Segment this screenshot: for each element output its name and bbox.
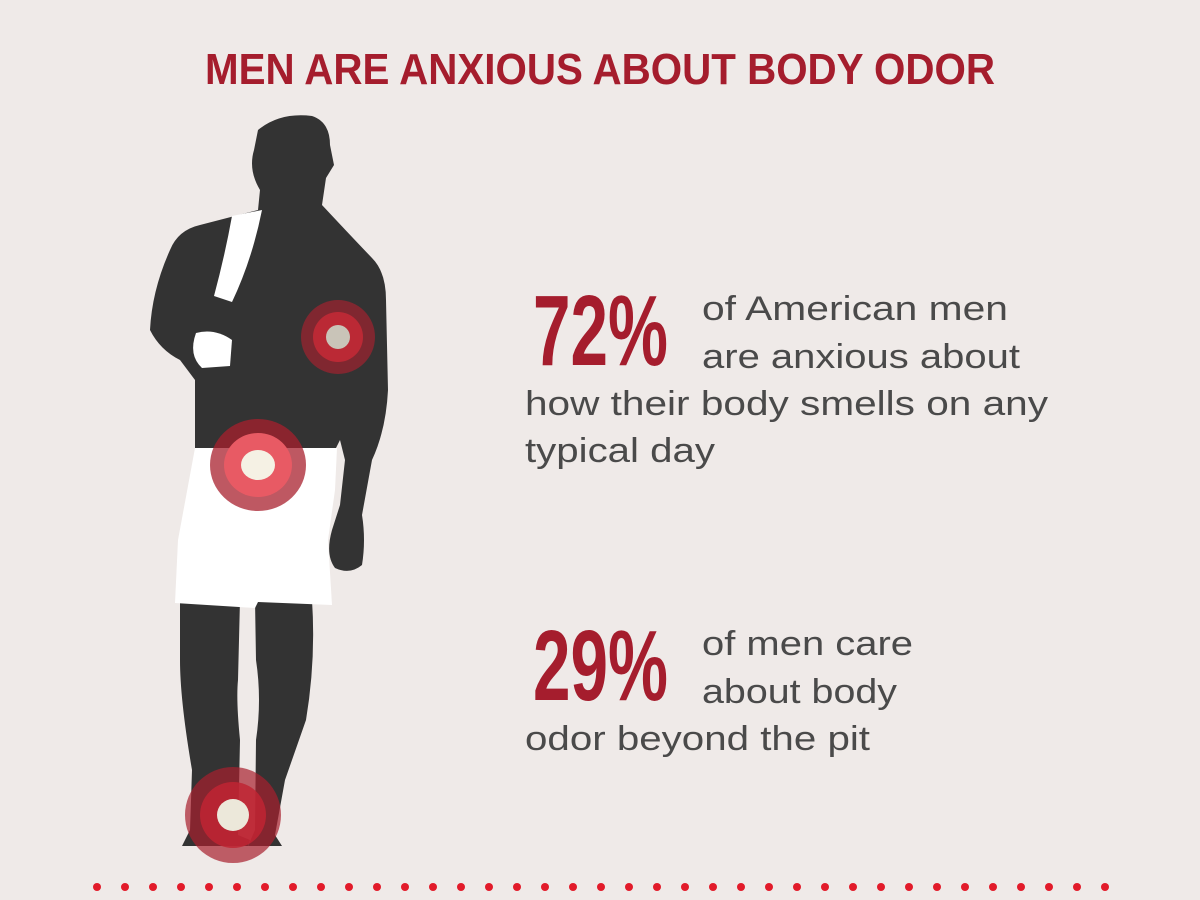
dotted line	[93, 883, 1109, 891]
stat 2: of men care	[702, 625, 913, 663]
stat 1: 72%	[533, 275, 668, 387]
title: MEN ARE ANXIOUS ABOUT BODY ODOR	[205, 45, 995, 94]
stat 2: odor beyond the pit	[525, 720, 871, 758]
stat 1: of American men	[702, 290, 1008, 328]
stat 1: typical day	[525, 432, 715, 470]
target: feet	[185, 767, 281, 863]
stat 2	[525, 610, 913, 758]
figure: man silhouette	[150, 115, 388, 846]
stat 1	[525, 275, 1048, 470]
stat 1: are anxious about	[702, 338, 1021, 376]
towel	[214, 210, 262, 302]
shorts	[175, 448, 337, 608]
stat 2: 29%	[533, 610, 668, 722]
stat 2: about body	[702, 673, 897, 711]
target: armpit	[301, 300, 375, 374]
stat 1: how their body smells on any	[525, 385, 1048, 423]
target: groin	[210, 419, 306, 511]
